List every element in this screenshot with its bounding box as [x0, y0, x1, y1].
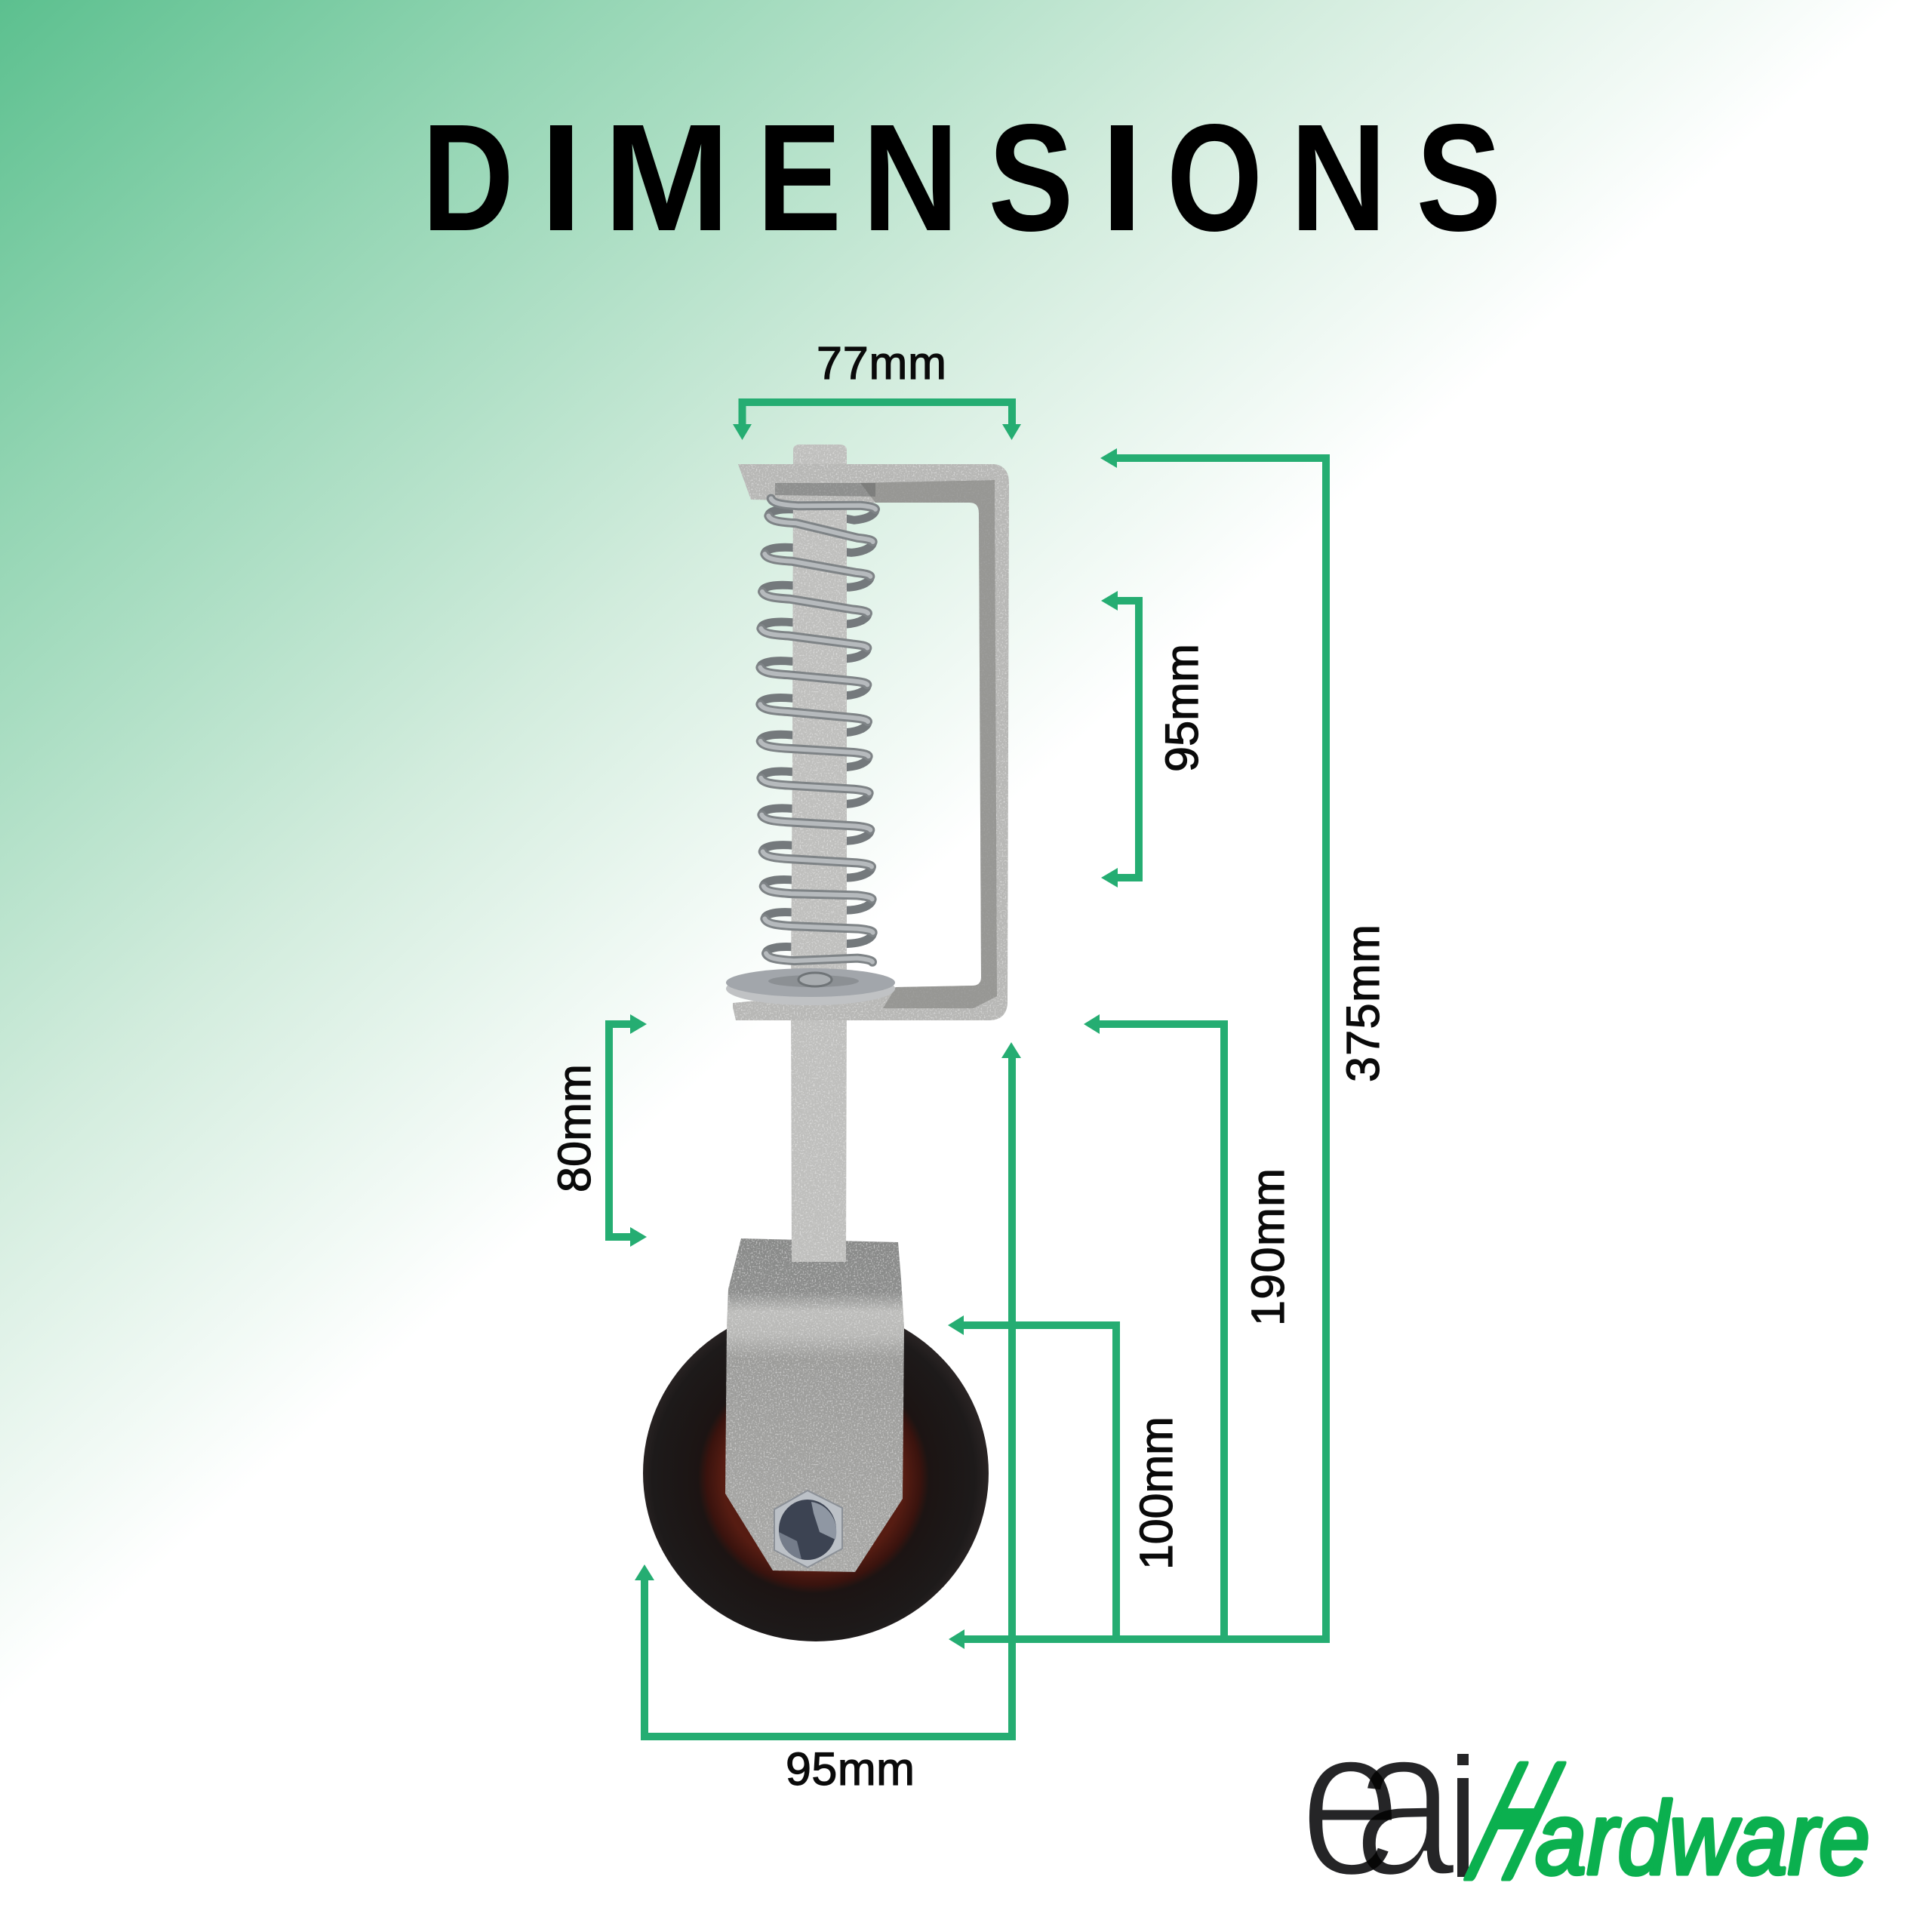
logo wordmark: eai [1300, 1681, 1469, 1920]
U bracket [733, 464, 1009, 1020]
dimension: 80mm shaft length: 80mm [549, 1064, 600, 1192]
title: O [1167, 92, 1263, 263]
dimension: 95mm wheel width: 95mm [786, 1743, 915, 1795]
dimension: 375mm overall height [1100, 448, 1389, 1639]
title: I [540, 92, 583, 263]
product photo: spring gate wheel [643, 445, 1009, 1641]
title: N [862, 92, 958, 263]
dimension: 95mm bracket opening: 95mm [1156, 644, 1208, 772]
title: E [757, 92, 841, 263]
title: D [422, 92, 514, 263]
logo wordmark: eai: a [1353, 1681, 1457, 1920]
dimension: 95mm bracket opening [1101, 591, 1208, 888]
logo wordmark: eai: e [1300, 1681, 1401, 1920]
dimension: 190mm: 190mm [1242, 1168, 1294, 1326]
wheel fork [725, 1238, 904, 1572]
title: S [1416, 92, 1502, 263]
washer [726, 968, 895, 1005]
bolt head [774, 1491, 842, 1567]
shaft [791, 445, 847, 1262]
spring back strands [760, 509, 875, 953]
spring front strands [760, 499, 875, 962]
dimension: 95mm wheel width [635, 1042, 1021, 1795]
title: M [604, 92, 731, 263]
logo: eai Hardware [1300, 1681, 1870, 1920]
dimension: 77mm bracket width: 77mm [817, 337, 946, 389]
dimension: 77mm bracket width [733, 337, 1021, 440]
dimension: 190mm [1084, 1014, 1294, 1639]
shared base line with arrow [949, 1629, 1330, 1649]
dimension: 100mm wheel diameter [948, 1315, 1182, 1639]
dimension: 80mm shaft length [549, 1014, 647, 1247]
dimension: 100mm wheel diameter: 100mm [1131, 1417, 1182, 1570]
logo script: Hardware: H [1443, 1730, 1586, 1912]
title: S [989, 92, 1073, 263]
wheel [643, 1305, 989, 1641]
title: N [1291, 92, 1387, 263]
logo script: Hardware: ardware [1535, 1781, 1870, 1897]
dimension: 375mm overall height: 375mm [1337, 924, 1389, 1082]
title: I [1100, 92, 1143, 263]
logo script: Hardware [1443, 1730, 1870, 1912]
